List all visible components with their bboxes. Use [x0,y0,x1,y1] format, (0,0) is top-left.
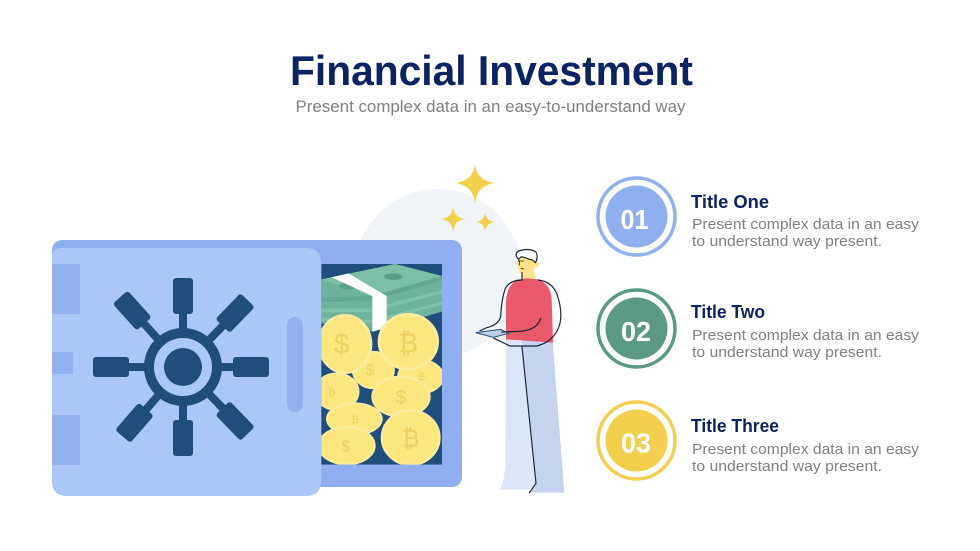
heading: Title One [691,192,769,212]
coins: $ [342,438,351,455]
description: Present complex data in an easy [692,442,920,458]
description: to understand way present. [692,459,882,475]
face details [518,260,524,269]
number badge 01 [598,178,675,255]
left leg [500,338,536,489]
coins: ₿ [418,371,425,383]
description: Present complex data in an easy [692,217,920,233]
item: Title One [598,178,920,255]
neck and head [517,255,539,280]
body outline [480,273,561,493]
number badge 01: 01 [620,204,648,235]
background circle [354,189,522,357]
icon: vault wheel [93,278,269,456]
person illustration [476,249,564,493]
icon: sparkles [441,164,495,232]
coins: ₿ [328,386,335,398]
safe door [52,248,321,496]
item: Title Three [598,402,920,479]
heading: Title Three [691,416,779,436]
coins: $ [396,386,407,407]
number badge 02: 02 [621,316,651,347]
description [692,442,920,475]
safe illustration [52,240,462,496]
description: to understand way present. [692,345,882,361]
door hinges [52,264,80,465]
description: Present complex data in an easy [692,328,920,344]
description [692,328,920,361]
right leg [522,340,564,493]
cash stack [321,264,442,332]
coins: $ [366,362,375,379]
description: to understand way present. [692,234,882,250]
description [692,217,920,250]
safe body [52,240,462,487]
tablet [476,329,509,337]
coins: ₿ [351,414,359,426]
safe contents [315,264,443,465]
number badge 02 [598,290,675,367]
coins [315,314,443,465]
number badge 03: 03 [621,428,651,458]
coins: $ [334,328,350,359]
item: Title Two [598,290,920,367]
title: Financial Investment [290,47,693,94]
hair [516,249,537,263]
coins: ₿ [402,426,420,453]
subtitle: Present complex data in an easy-to-understand way [296,98,686,116]
door handle [287,317,303,412]
coins: ₿ [398,328,418,358]
heading: Title Two [691,302,765,322]
shirt [506,278,553,343]
number badge 03 [598,402,675,479]
